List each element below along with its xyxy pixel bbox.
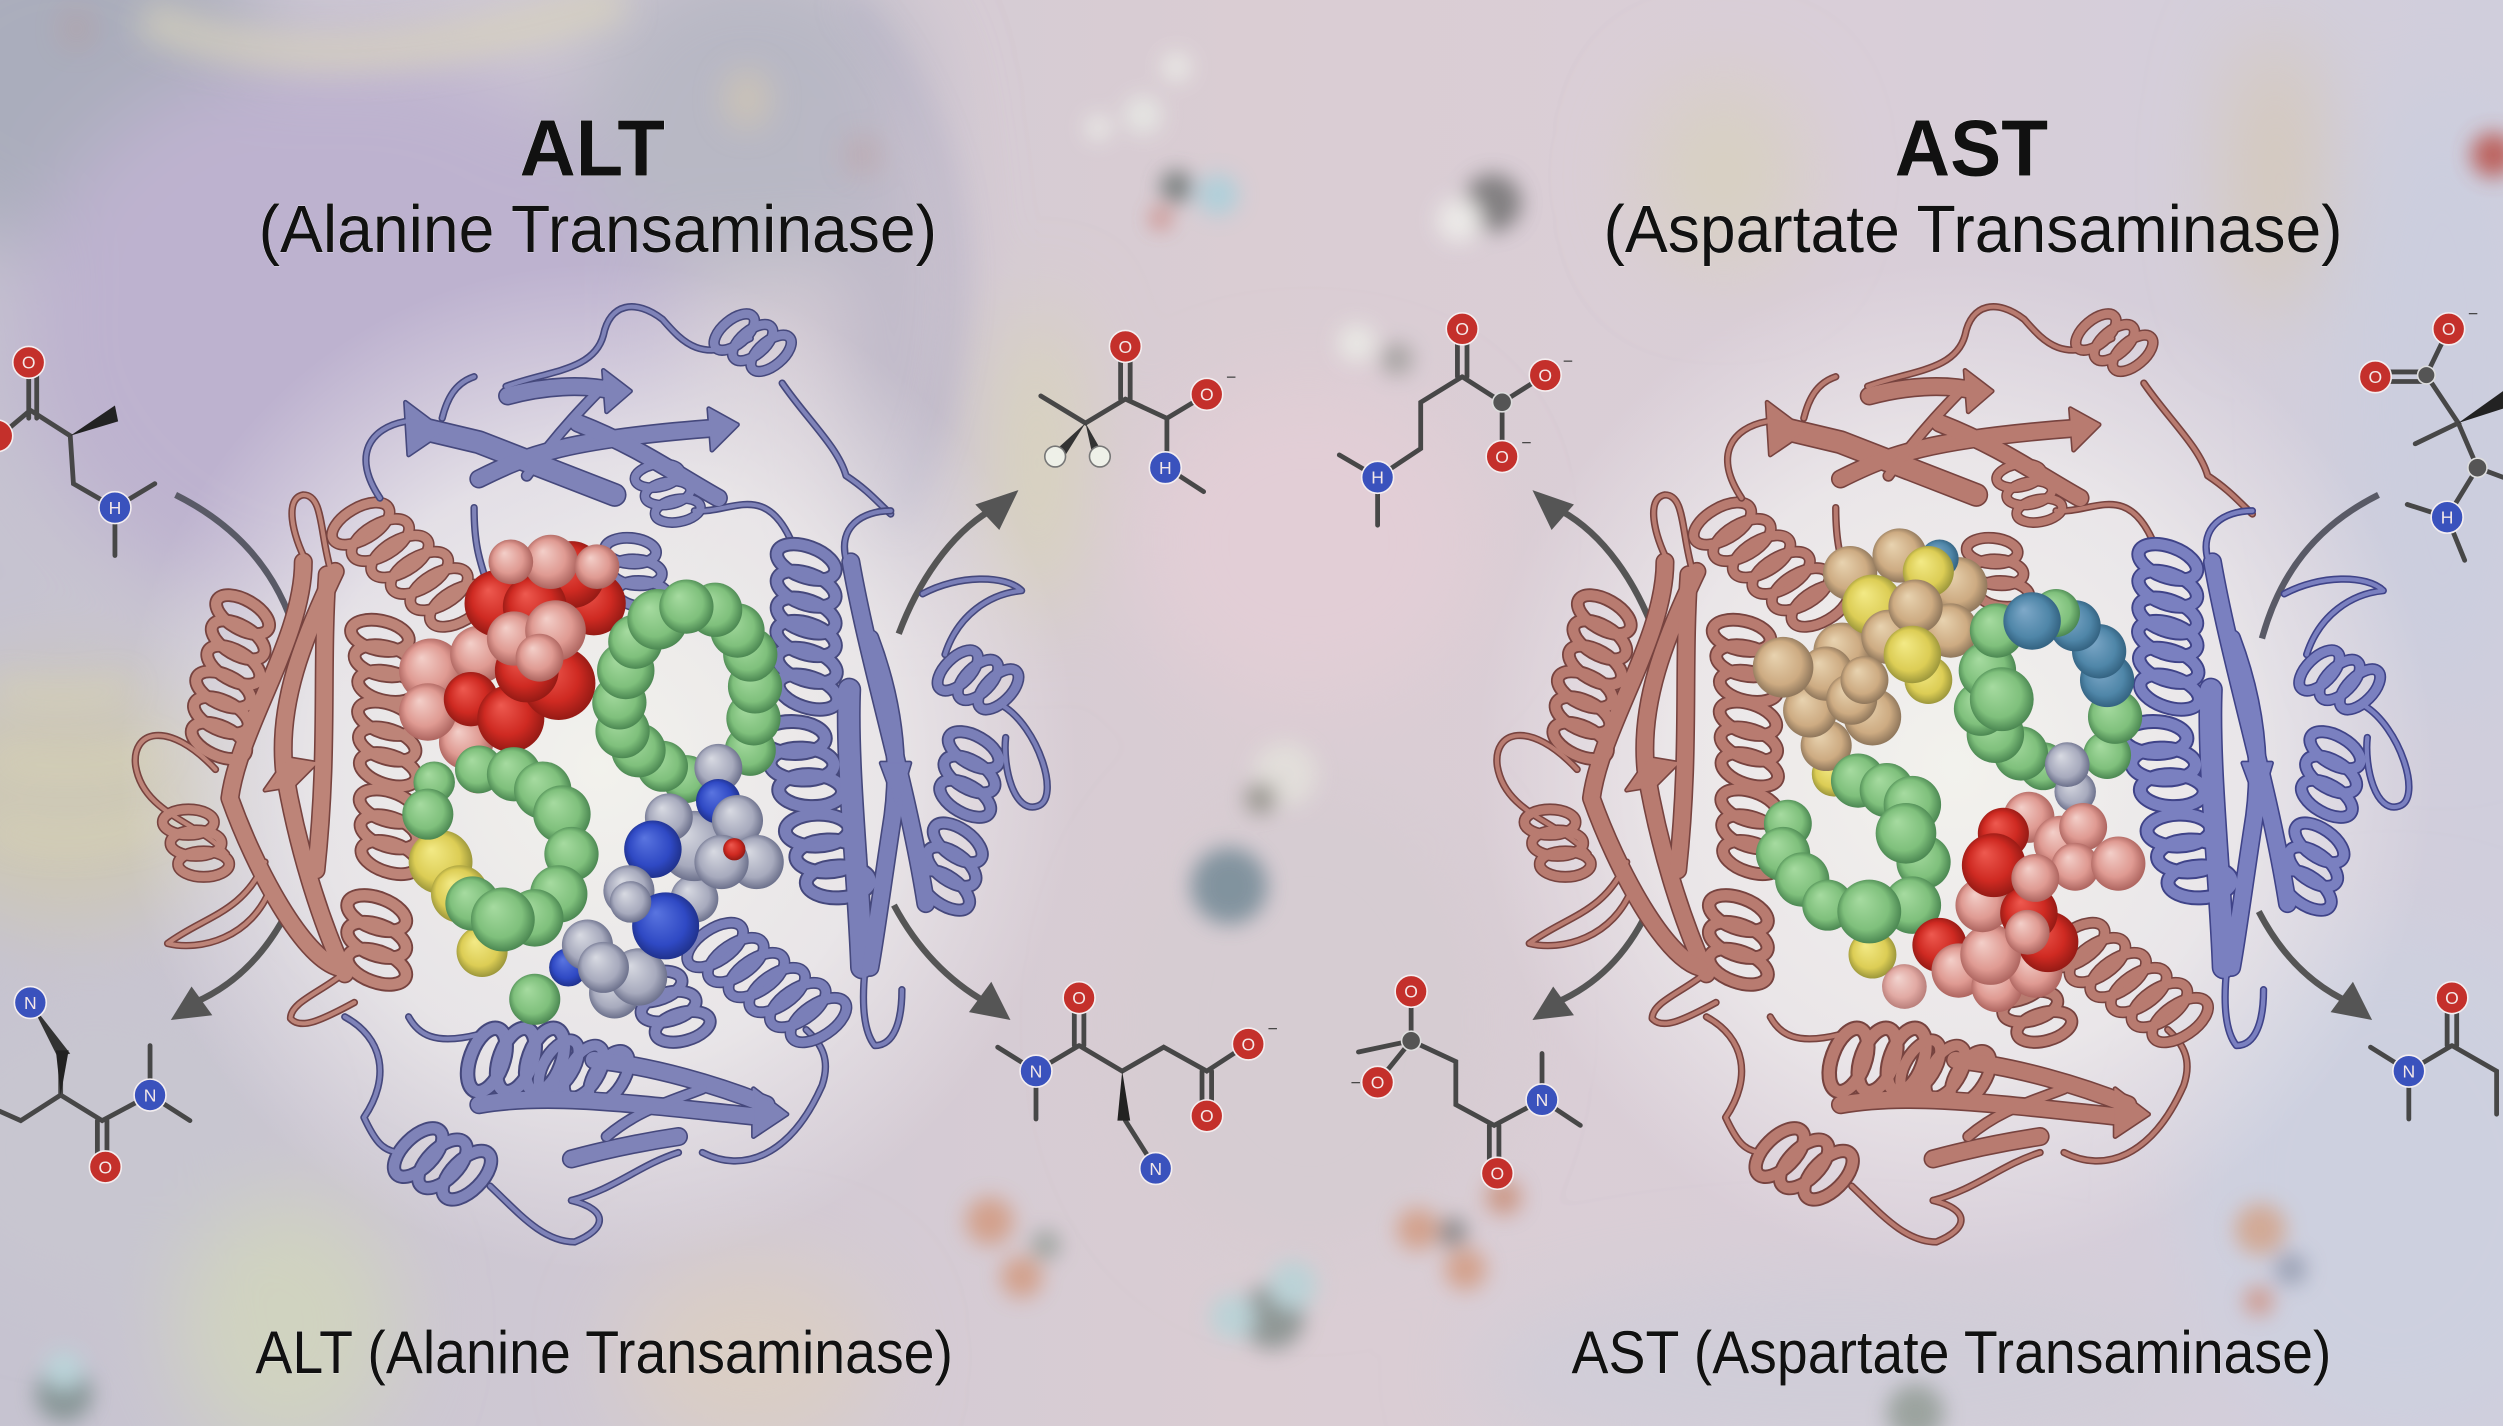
spheres: red cluster — [1882, 792, 2145, 1012]
molecule: AST product bottom left — [1350, 975, 1580, 1189]
arrows behind AST — [1532, 490, 2378, 1020]
atom: nitrogen — [1149, 452, 1181, 484]
atom: oxygen with charge: − — [1563, 351, 1573, 371]
atom: nitrogen — [2431, 501, 2463, 533]
atom: oxygen: O — [2368, 367, 2382, 387]
heading: AST — [1895, 104, 2048, 193]
molecule: ALT substrate top left — [0, 346, 155, 556]
molecule: AST product bottom right — [2371, 982, 2497, 1119]
title: ALT — [259, 104, 937, 267]
atom: nitrogen: N — [2402, 1062, 2415, 1082]
glow behind AST protein — [1477, 263, 2434, 1269]
atom: nitrogen — [1140, 1153, 1172, 1184]
arrow: product out lower left — [171, 912, 287, 1020]
molecule: ALT product bottom right — [998, 982, 1278, 1184]
atom: oxygen — [1395, 975, 1427, 1007]
atom: oxygen with charge: O — [1200, 385, 1214, 405]
atom: hydrogen — [1089, 446, 1110, 467]
atom: oxygen: O — [99, 1157, 112, 1177]
arrow: substrate into ALT — [176, 495, 297, 639]
ribbon: top domain blue — [366, 299, 891, 621]
subtitle: (Aspartate Transaminase) — [1603, 192, 2343, 267]
ribbon: top domain pink — [1728, 299, 2252, 621]
atom: oxygen: O — [2445, 988, 2459, 1008]
atom: oxygen — [2359, 361, 2391, 393]
spheres: upper green and blue chain — [1954, 589, 2142, 790]
arrows behind ALT — [171, 490, 1018, 1020]
atom: oxygen — [13, 346, 45, 378]
atom: oxygen: O — [1491, 1164, 1504, 1184]
atom: oxygen — [1063, 982, 1095, 1014]
spheres: stem — [2045, 742, 2096, 813]
blurred stripes — [0, 0, 956, 839]
atom: oxygen with charge — [1486, 433, 1532, 473]
atom: nitrogen: N — [1149, 1159, 1162, 1179]
arrow: product out lower left — [1532, 912, 1647, 1020]
arrow: product out upper left — [1532, 490, 1655, 635]
ribbon: left domain pink — [1497, 480, 1863, 1024]
atom: oxygen: O — [1072, 988, 1086, 1008]
atom: oxygen with charge — [2433, 303, 2478, 345]
atom: oxygen — [1446, 313, 1478, 345]
atom: oxygen with charge: − — [2468, 303, 2478, 323]
heading: ALT — [520, 104, 665, 193]
atom: nitrogen: H — [2441, 508, 2453, 528]
atom: carbon — [2418, 366, 2435, 384]
arrow: product out lower right — [2259, 912, 2372, 1020]
spheres: tan cluster — [1753, 623, 1901, 797]
atom: hydrogen — [1045, 446, 1066, 467]
atom: oxygen with charge: O — [1495, 447, 1509, 467]
atom: oxygen with charge: O — [1538, 366, 1552, 386]
atom: oxygen: O — [1200, 1106, 1214, 1126]
arrow: substrate into AST — [2262, 495, 2378, 639]
molecule: ALT product bottom left — [0, 987, 190, 1183]
ribbon: right domain blue — [752, 511, 1047, 1046]
atom: oxygen with charge — [1350, 1066, 1394, 1098]
atom: oxygen with charge: − — [1226, 367, 1236, 387]
atom: oxygen with charge: − — [1521, 433, 1532, 453]
atom: oxygen — [1191, 1100, 1223, 1132]
atom: oxygen with charge: − — [1267, 1018, 1278, 1038]
atom: oxygen with charge: − — [1350, 1073, 1361, 1093]
atom: oxygen with charge: O — [1241, 1034, 1255, 1054]
molecule: AST substrate top right — [2359, 303, 2503, 560]
atom: nitrogen: H — [1159, 458, 1172, 478]
atom: nitrogen: H — [1371, 468, 1384, 488]
atom: oxygen: O — [1404, 982, 1418, 1002]
atom: oxygen with charge: O — [2442, 319, 2456, 339]
atom: nitrogen: N — [24, 993, 37, 1013]
atom: oxygen — [1481, 1157, 1513, 1189]
atom: nitrogen — [99, 492, 131, 524]
glow behind ALT protein — [120, 263, 1078, 1269]
ribbon: lower right helix blue — [673, 901, 860, 1064]
atom: oxygen: O — [1119, 337, 1132, 357]
atom: carbon — [1493, 393, 1512, 412]
caption: AST: AST (Aspartate Transaminase) — [1572, 1318, 2331, 1386]
atom: nitrogen — [1362, 461, 1394, 493]
atom: oxygen with charge — [1232, 1018, 1278, 1060]
ribbon: bottom domain pink — [1706, 950, 2187, 1242]
atom: oxygen — [89, 1151, 121, 1183]
atom: nitrogen — [1020, 1055, 1052, 1087]
protein: ALT — [135, 299, 1047, 1242]
spheres: yellow cluster — [1823, 528, 1987, 704]
spheres: blue and grey cluster — [549, 744, 784, 1018]
ribbon: right domain blue — [2113, 511, 2409, 1046]
arrow: product out lower right — [894, 905, 1010, 1020]
ribbon: left domain pink — [135, 480, 501, 1024]
atom: carbon — [1402, 1031, 1421, 1050]
atom: nitrogen: H — [109, 498, 121, 518]
atom: nitrogen: N — [144, 1085, 156, 1105]
atom: oxygen with charge — [1191, 367, 1236, 410]
atom: nitrogen: N — [1030, 1062, 1042, 1082]
arrow: product out upper right — [899, 490, 1018, 634]
spheres: red cluster — [399, 535, 626, 793]
atom: oxygen: O — [22, 353, 36, 373]
spheres: lower green and yellow chain — [402, 745, 599, 1025]
ribbon: bottom domain blue — [345, 950, 825, 1242]
subtitle: (Alanine Transaminase) — [259, 192, 937, 267]
protein: AST — [1497, 299, 2409, 1242]
ribbon: lower right helix pink — [2035, 901, 2222, 1064]
spheres: upper green chain — [592, 579, 782, 803]
atom: oxygen — [0, 420, 13, 452]
molecule: AST product top left — [1339, 313, 1573, 525]
caption: ALT: ALT (Alanine Transaminase) — [255, 1318, 953, 1386]
atom: oxygen: O — [1455, 319, 1469, 339]
atom: oxygen with charge — [1529, 351, 1573, 391]
atom: nitrogen — [134, 1079, 166, 1111]
atom: oxygen with charge: O — [1371, 1073, 1384, 1093]
atom: oxygen — [1109, 330, 1141, 362]
title: AST — [1603, 104, 2343, 267]
atom: nitrogen — [1526, 1084, 1558, 1116]
spheres: lower green chain — [1756, 753, 1951, 979]
atom: nitrogen — [14, 987, 46, 1018]
atom: carbon — [2468, 458, 2487, 477]
atom: nitrogen: N — [1536, 1090, 1548, 1110]
molecule: ALT product top right — [1041, 330, 1236, 492]
